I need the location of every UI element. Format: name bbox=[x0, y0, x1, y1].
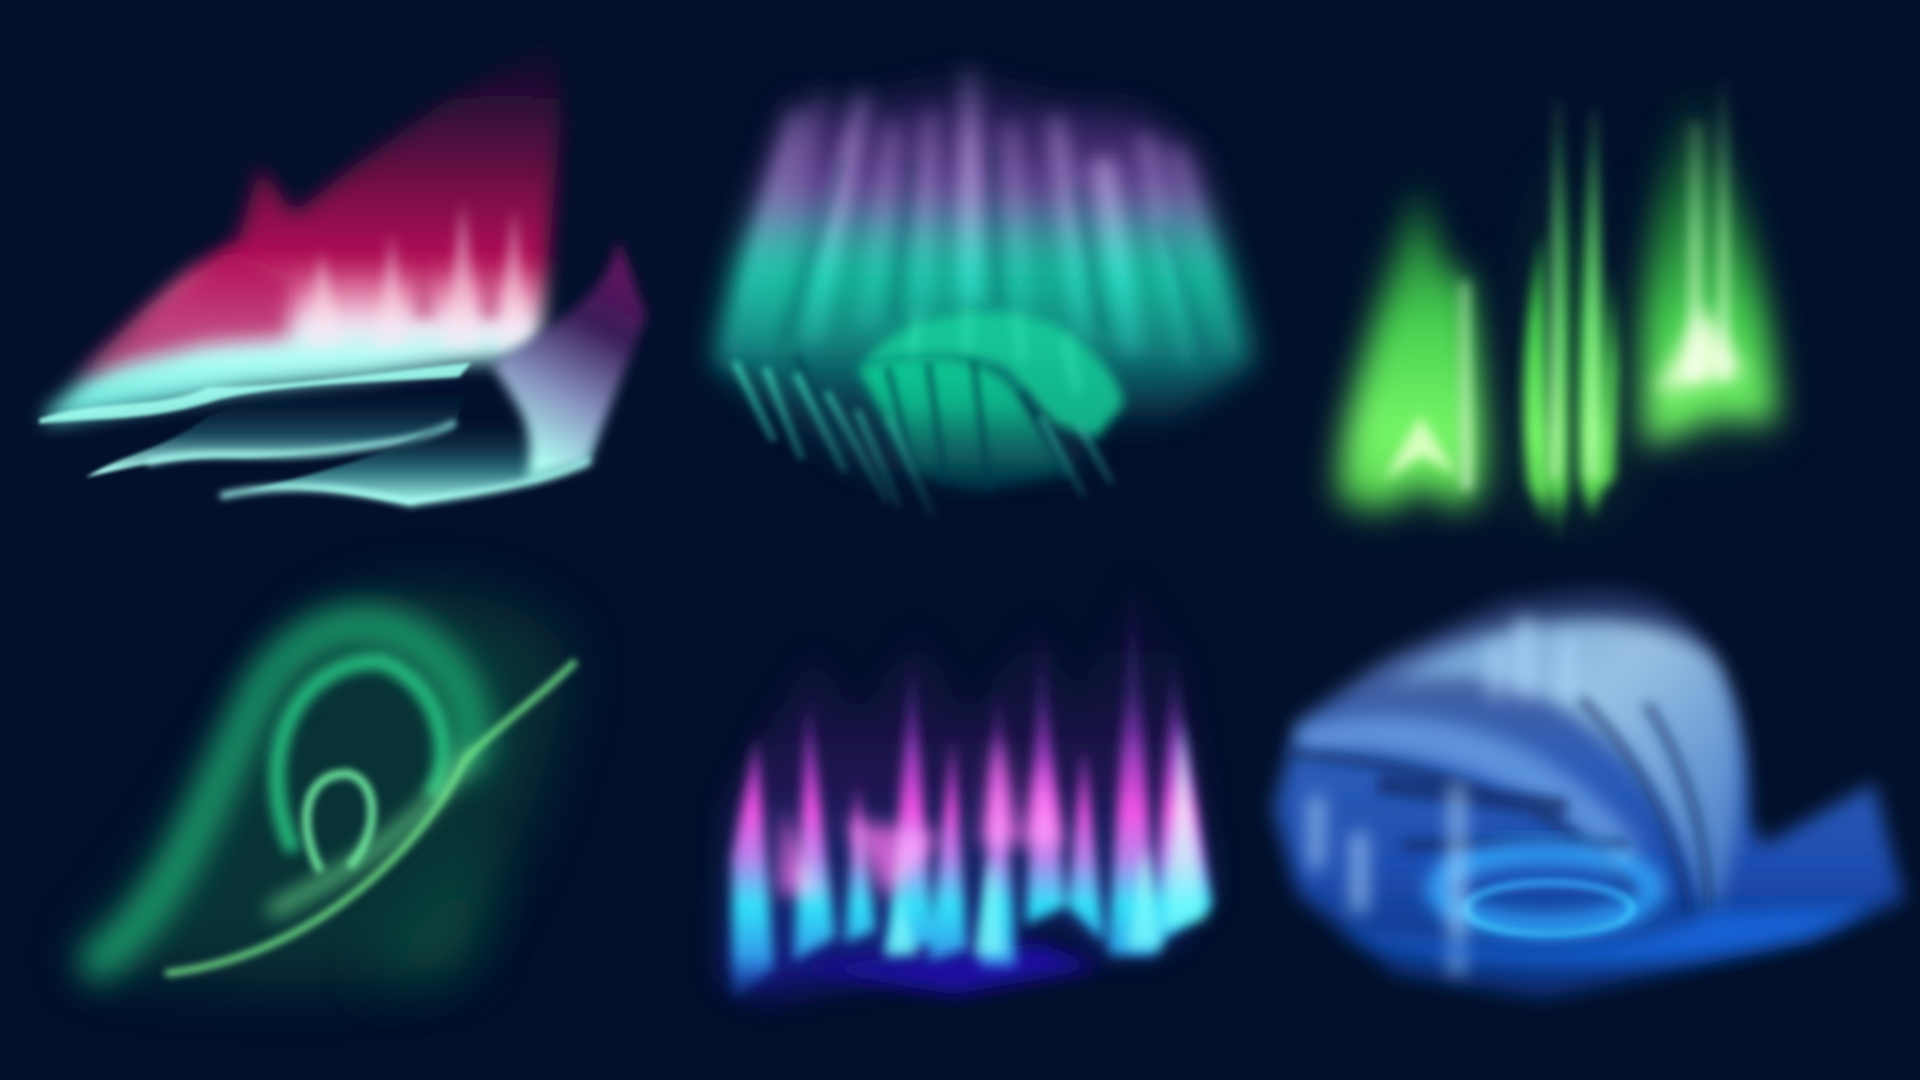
band: middle cyan ribbon bbox=[86, 373, 475, 478]
aurora: green spiral, bottom left bbox=[73, 592, 576, 983]
flames: narrow centre streaks bbox=[1524, 80, 1618, 545]
aurora: crimson and cyan curtain, top left bbox=[39, 37, 647, 504]
aurora: green flames, top right bbox=[1340, 67, 1776, 545]
spikes bbox=[732, 569, 1212, 1002]
aurora: blue swirl, bottom right bbox=[1273, 588, 1904, 998]
curtain: crimson lower-left shading bbox=[73, 251, 294, 380]
band: upper cyan ribbon bbox=[39, 362, 471, 424]
band: lower right ribbon bbox=[218, 239, 647, 504]
lower dome fold bbox=[863, 313, 1124, 438]
rays: fan of curtain streaks bbox=[725, 67, 1237, 367]
swirl: pale upper fold bbox=[1390, 620, 1740, 918]
aurora: magenta and cyan spikes, bottom centre bbox=[722, 563, 1212, 1002]
flames: broad left and right curtains bbox=[1340, 67, 1776, 514]
aurora: purple and teal rayed dome, top centre bbox=[713, 67, 1255, 517]
